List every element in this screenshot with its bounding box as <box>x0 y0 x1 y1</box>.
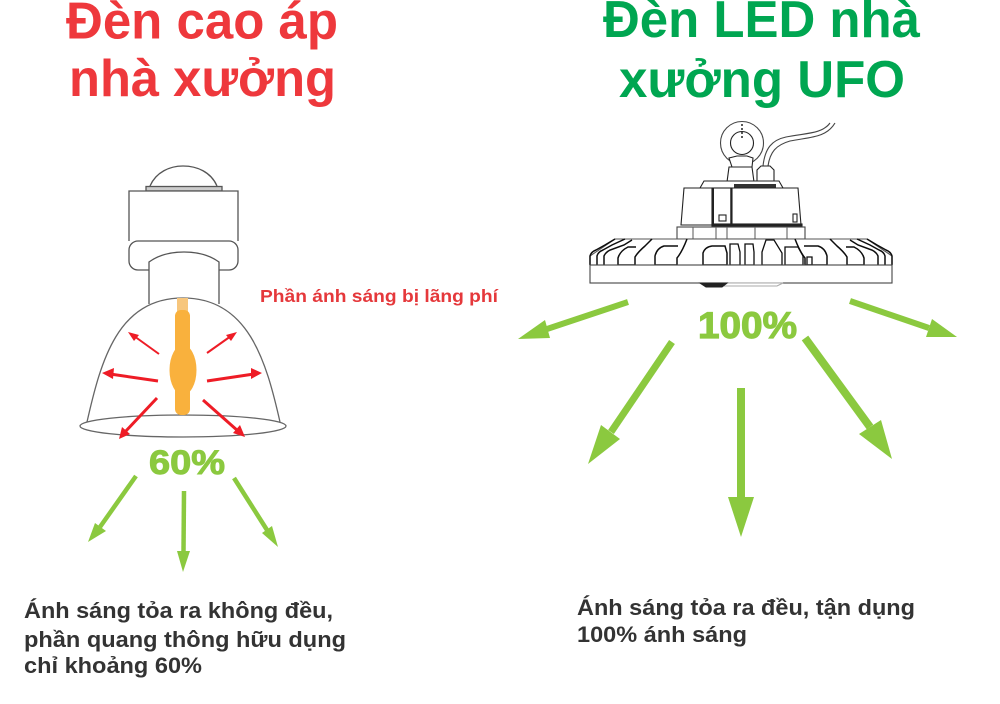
lamp housing <box>129 166 238 304</box>
green arrows: 60% useful light <box>88 476 278 572</box>
value: 100%: 100% <box>698 305 797 346</box>
label: wasted light: Phần ánh sáng bị lãng phí <box>260 286 499 306</box>
title: Đèn cao áp nhà xưởng: nhà xưởng <box>69 50 336 108</box>
icon: LED UFO high bay lamp <box>590 122 892 287</box>
hanging ring <box>720 122 764 182</box>
center fins <box>730 240 812 265</box>
text: high-pressure lamp description: phần quang thông hữu dụng <box>24 627 346 652</box>
red arrows: wasted light <box>102 332 262 439</box>
icon: high-pressure lamp <box>80 166 286 439</box>
title: Đèn LED nhà xưởng UFO: xưởng UFO <box>619 51 905 109</box>
heat sink fins left <box>590 239 727 265</box>
value: 60%: 60% <box>149 444 225 482</box>
text: high-pressure lamp description: chỉ khoảng 60% <box>24 653 202 678</box>
text: high-pressure lamp description <box>24 598 346 678</box>
driver housing <box>677 181 805 244</box>
green arrows: 100% useful light <box>518 301 957 537</box>
heat sink outline <box>590 239 892 265</box>
cable <box>763 123 835 166</box>
title: Đèn LED nhà xưởng UFO <box>603 0 921 109</box>
lamp bulb <box>170 298 196 415</box>
text: high-pressure lamp description: Ánh sáng tỏa ra không đều, <box>24 598 333 623</box>
title: Đèn cao áp nhà xưởng <box>66 0 338 108</box>
text: LED lamp description: Ánh sáng tỏa ra đều, tận dụng <box>577 595 915 620</box>
glass shade <box>80 298 286 437</box>
heat sink fins right <box>795 239 892 265</box>
text: LED lamp description <box>577 595 915 647</box>
lamp base ring <box>590 265 892 287</box>
cable gland <box>757 166 774 182</box>
text: LED lamp description: 100% ánh sáng <box>577 622 747 647</box>
